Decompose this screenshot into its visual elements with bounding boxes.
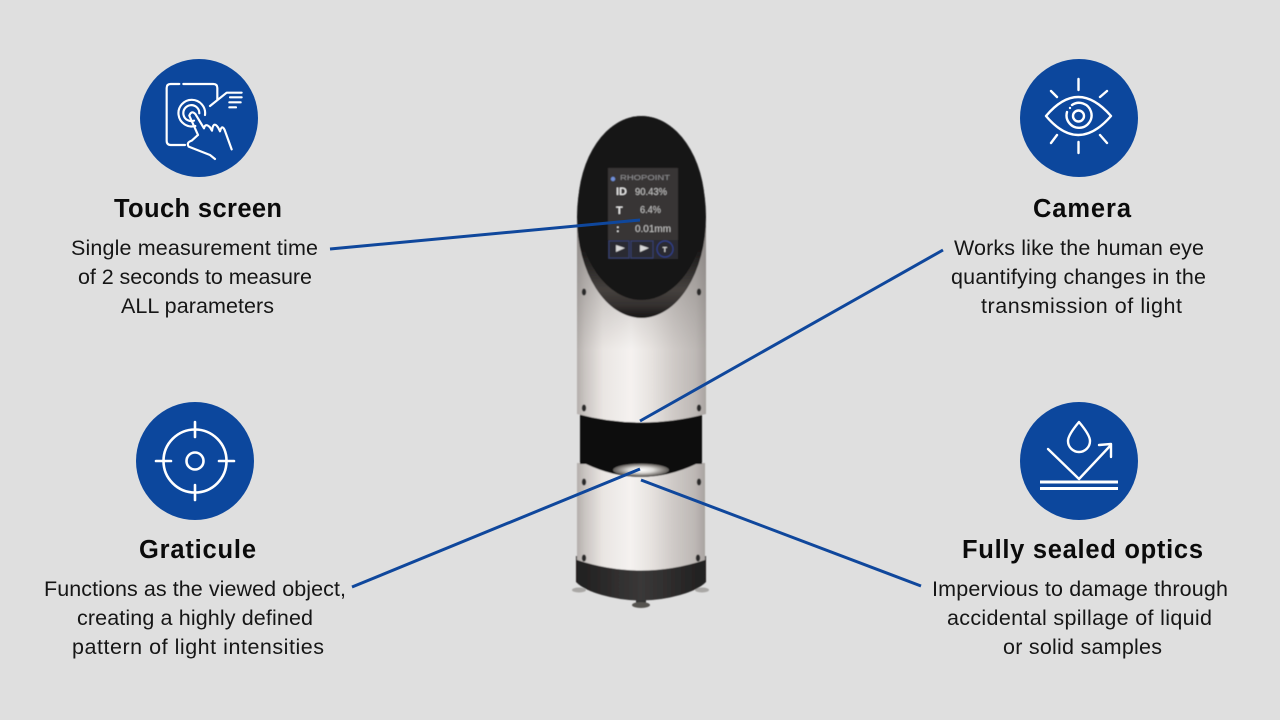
heading: Fully sealed optics (962, 536, 1203, 564)
upper cylinder (577, 225, 706, 422)
text block: Single measurement time (71, 236, 318, 260)
icon: touch screen (140, 59, 258, 177)
heading: Graticule (139, 536, 256, 564)
sample opening (580, 412, 702, 477)
text block: Functions as the viewed object, (44, 577, 346, 601)
text block: quantifying changes in the (951, 265, 1206, 289)
text block (932, 577, 1228, 659)
touch display (608, 168, 678, 259)
touch display: T (616, 205, 623, 217)
text block: Works like the human eye (954, 236, 1204, 260)
panel: graticule (44, 402, 346, 659)
base ring (576, 556, 706, 600)
head bevel (577, 116, 706, 318)
screws (582, 288, 701, 562)
text block (951, 236, 1206, 318)
icon: droplet on surface (1020, 402, 1138, 520)
text block: Impervious to damage through (932, 577, 1228, 601)
text block: of 2 seconds to measure (78, 265, 312, 289)
touch display: 90.43% (635, 186, 667, 198)
touch display: : (616, 223, 620, 235)
text block (44, 577, 346, 659)
text block (71, 236, 318, 318)
text block: creating a highly defined (77, 606, 313, 630)
touch display: RHOPOINT (620, 175, 671, 182)
touch display: 6.4% (640, 204, 661, 216)
text block: or solid samples (1003, 635, 1162, 659)
text block: transmission of light (981, 294, 1182, 318)
touch display: ID (616, 186, 627, 198)
lower cylinder (577, 463, 705, 570)
icon: crosshair (136, 402, 254, 520)
head face (578, 116, 705, 300)
heading: Camera (1033, 195, 1132, 223)
touch display: T (662, 245, 668, 254)
graticule lens (613, 464, 669, 476)
touch display: 0.01mm (635, 223, 671, 235)
heading: Touch screen (114, 195, 282, 223)
panel: camera (951, 59, 1206, 318)
product: measuring instrument (572, 116, 709, 608)
icon: eye (1020, 59, 1138, 177)
leader lines (330, 220, 943, 587)
text block: pattern of light intensities (72, 635, 324, 659)
panel: touch screen (71, 59, 318, 318)
panel: fully sealed optics (932, 402, 1228, 659)
foot (572, 588, 709, 608)
text block: ALL parameters (121, 294, 274, 318)
text block: accidental spillage of liquid (947, 606, 1212, 630)
